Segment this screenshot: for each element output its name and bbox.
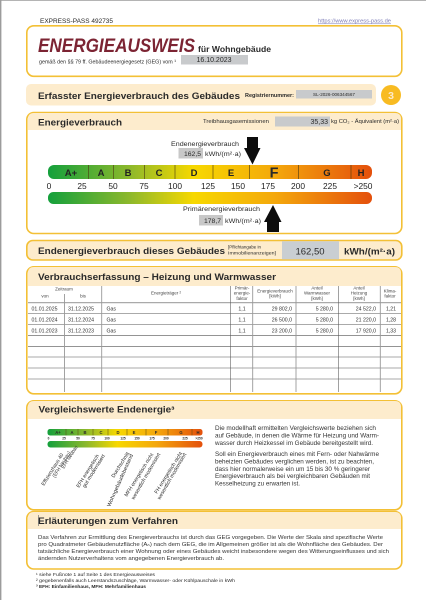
- row 2025: 31.12.2025: [68, 306, 94, 312]
- rotated building labels: Effizienzhaus 40: [41, 452, 65, 487]
- mini scale: 0: [48, 436, 50, 440]
- table header: Energieverbrauch: [257, 288, 293, 294]
- rotated building labels: (EFH Neubau): [52, 450, 73, 479]
- rotated building labels: wesentlich modernisiert: [157, 452, 189, 501]
- footnotes: ³ EFH: Einfamilienhaus, MFH: Mehrfamilienhaus: [36, 584, 147, 589]
- colour scale: G: [323, 168, 331, 179]
- rotated building labels: EFH energetisch: [76, 454, 101, 489]
- value: 162,50: [295, 246, 325, 258]
- colour scale: D: [191, 168, 198, 179]
- mini scale: 25: [62, 436, 66, 440]
- scale numbers: 75: [139, 181, 149, 191]
- heading: Endenergieverbrauch dieses Gebäudes: [38, 246, 225, 257]
- final energy label: Endenergieverbrauch: [171, 141, 239, 148]
- explanatory text: Kesselheizung zu erwarten ist.: [215, 482, 300, 488]
- mini scale: B: [83, 430, 87, 435]
- explanatory paragraph: pro Quadratmeter Gebäudenutzfläche (Aₙ) nach dem GEG, die im Allgemeinen größer ist als die Wohnfläche des Gebäudes. Der: [38, 542, 383, 548]
- scale numbers: 225: [323, 181, 337, 191]
- explanatory text: dass hier normalerweise ein um 15 bis 30 % geringerer: [215, 467, 370, 473]
- mini scale: 225: [182, 436, 188, 440]
- row 2024: [32, 318, 396, 324]
- arrow: primary energy marker: [264, 205, 282, 232]
- table header: [41, 286, 397, 301]
- mini scale: D: [116, 430, 120, 435]
- panel: final energy consumption of this building: [27, 240, 402, 260]
- scale numbers: 175: [261, 181, 275, 191]
- final energy value: 162,5: [184, 151, 201, 158]
- row 2024: 1,1: [238, 318, 246, 324]
- table header: [kWh]: [353, 296, 365, 301]
- row 2024: 26 500,0: [272, 318, 292, 324]
- row 2024: 5 280,0: [316, 318, 333, 324]
- mini scale: A: [70, 430, 74, 435]
- row 2023: 23 200,0: [272, 328, 292, 334]
- unit: kWh/(m²·a): [344, 246, 395, 256]
- heading: Vergleichswerte Endenergie³: [38, 404, 175, 414]
- explanatory text: Die modellhaft ermittelten Vergleichswerte beziehen sich: [215, 426, 376, 432]
- value field background: [282, 241, 339, 259]
- mini scale: C: [99, 430, 103, 435]
- mini scale: 175: [149, 436, 155, 440]
- footnotes: ¹ siehe Fußnote 1 auf Seite 1 des Energieausweises: [36, 572, 156, 578]
- table header: Zeitraum: [55, 286, 73, 292]
- colour scale: B: [125, 168, 132, 179]
- rotated building labels: [41, 445, 189, 508]
- explanatory text: wasser durch Heizkessel im Gebäude bereitgestellt wird.: [214, 441, 373, 447]
- arrow: final energy marker: [244, 137, 260, 164]
- scale numbers: 25: [77, 181, 87, 191]
- table header: bis: [80, 294, 87, 298]
- row 2024: Gas: [106, 318, 116, 324]
- registration number: SL-2026-006344567: [313, 92, 355, 97]
- mini scale: 50: [76, 436, 80, 440]
- title: ENERGIEAUSWEIS: [38, 35, 195, 57]
- row 2025: [32, 306, 396, 312]
- explanatory text: Soll ein Energieverbrauch eines mit Fern- oder Nahwärme: [215, 452, 380, 458]
- table header: Anteil: [311, 286, 323, 290]
- panel: comparison values: [27, 401, 402, 510]
- mini scale: 200: [163, 436, 169, 440]
- row 2025: 01.01.2025: [32, 306, 58, 312]
- table header: Warmwasser: [304, 291, 331, 296]
- row 2023: Gas: [106, 328, 116, 334]
- explanatory paragraph: ändernden Nutzerverhaltens vom angegebenen Energieverbrauch ab.: [38, 556, 224, 562]
- subtitle: für Wohngebäude: [198, 44, 271, 54]
- rotated building labels: Durchschnitt: [111, 451, 131, 479]
- mini scale: F: [155, 430, 158, 435]
- colour scale: F: [270, 166, 279, 182]
- table header: Heizung: [351, 291, 368, 296]
- mini scale: [48, 429, 203, 448]
- row 2024: 31.12.2024: [68, 318, 94, 324]
- explanatory paragraph: [38, 535, 389, 562]
- mini scale: 150: [134, 436, 140, 440]
- footnotes: ² gegebenenfalls auch Leerstandszuschläge, Warmwasser- oder Kühlpauschale in kWh: [36, 578, 236, 583]
- final energy value: [178, 148, 241, 158]
- primary energy value: kWh/(m²·a): [225, 218, 261, 225]
- panel: section heading bar: [26, 84, 376, 106]
- panel: final energy consumption of this building: Immobilienanzeigen]: [228, 250, 276, 256]
- scale numbers: 150: [231, 181, 245, 191]
- mini scale: 125: [120, 436, 126, 440]
- row 2023: 31.12.2023: [68, 328, 94, 334]
- table header: faktor: [236, 296, 248, 301]
- explanatory text: [214, 426, 380, 488]
- legal reference: gemäß den §§ 79 ff. Gebäudeenergiegesetz (GEG) vom ¹: [39, 60, 176, 66]
- table header: von: [41, 294, 49, 298]
- emissions label: Treibhausgasemissionen: [203, 119, 269, 125]
- explanatory text: beheizten Gebäudes verglichen werden, ist zu beachten,: [215, 460, 374, 466]
- explanatory paragraph: tatsächliche Energieverbrauch einer Wohnung oder eines Gebäudes weicht insbesondere wegen des Witterungseinflusses und sich: [38, 549, 389, 555]
- row 2023: 17 920,0: [356, 328, 376, 334]
- panel: title: [27, 26, 402, 76]
- colour scale: E: [228, 168, 234, 179]
- row 2023: 01.01.2023: [32, 328, 58, 334]
- top line: website link: https://www.express-pass.de: [318, 18, 391, 24]
- panel header: [28, 113, 401, 130]
- emissions value: [275, 116, 330, 126]
- panel: consumption records: [27, 267, 402, 394]
- mini scale: E: [133, 430, 136, 435]
- panel: energy consumption: [27, 112, 402, 234]
- row 2025: Gas: [106, 306, 116, 312]
- rotated building labels: Wohngebäudebestand: [106, 453, 135, 508]
- rotated building labels: gut modernisiert: [82, 453, 107, 489]
- table header: Primär-: [235, 286, 250, 290]
- row 2025: 1,21: [386, 306, 396, 312]
- rotated building labels: EFH Neubau: [61, 445, 80, 470]
- gradient bar: [48, 192, 372, 204]
- colour scale: H: [358, 168, 365, 179]
- badge: page number: 3: [388, 90, 394, 102]
- row 2023: 1,1: [238, 328, 246, 334]
- row 2025: 5 280,0: [316, 306, 333, 312]
- section heading: Erfasster Energieverbrauch des Gebäudes: [38, 91, 240, 102]
- row 2024: 1,28: [386, 318, 396, 324]
- row 2024: 21 220,0: [356, 318, 376, 324]
- colour scale: C: [156, 168, 163, 179]
- panel: explanations: [27, 512, 402, 569]
- explanatory text: Energieverbrauch als bei vergleichbaren Gebäuden mit: [215, 474, 370, 480]
- emissions value: 35,33: [310, 119, 328, 126]
- scale numbers: >250: [354, 181, 373, 191]
- mini scale: 100: [104, 436, 110, 440]
- rotated building labels: FH energetisch nicht: [154, 451, 184, 495]
- row 2023: [32, 328, 396, 334]
- table header: Anteil: [353, 286, 365, 290]
- scale numbers: 200: [291, 181, 305, 191]
- mini scale: H: [196, 430, 200, 435]
- primary energy value: 178,7: [204, 218, 221, 225]
- table header: energie-: [234, 291, 251, 296]
- scale numbers: 50: [108, 181, 118, 191]
- date field: [181, 55, 248, 64]
- registration number: [296, 90, 372, 98]
- colour scale: A+: [65, 168, 78, 179]
- row 2025: 29 802,0: [272, 306, 292, 312]
- scale numbers: 100: [168, 181, 182, 191]
- final energy value: kWh/(m²·a): [205, 151, 241, 158]
- primary energy value: [199, 215, 261, 226]
- table header: Energieträger ²: [151, 290, 182, 296]
- colour scale: [48, 165, 372, 179]
- row 2024: 01.01.2024: [32, 318, 58, 324]
- panel header: [28, 267, 401, 286]
- panel header: [28, 512, 401, 529]
- scale numbers: 125: [201, 181, 215, 191]
- registration label: Registriernummer:: [245, 93, 294, 99]
- note: [Pflichtangabe in: [228, 244, 262, 250]
- mini scale: G: [179, 430, 183, 435]
- table header: [kWh]: [311, 296, 323, 301]
- mini scale: A+: [55, 430, 61, 435]
- table header: [kWh]: [269, 294, 281, 298]
- date field: 16.10.2023: [196, 57, 232, 64]
- table lines: [28, 286, 401, 392]
- mini scale: 75: [91, 436, 95, 440]
- footnotes: [36, 572, 236, 589]
- table header: faktor: [384, 294, 396, 298]
- explanatory paragraph: Das Verfahren zur Ermittlung des Energieverbrauchs ist durch das GEG vorgegeben. Die Werte der Skala sind spezifische Werte: [38, 535, 383, 541]
- emissions unit: kg CO₂ - Äquivalent (m²·a): [331, 118, 399, 125]
- primary energy label: Primärenergieverbrauch: [183, 206, 260, 213]
- row 2025: 24 522,0: [356, 306, 376, 312]
- heading: Verbrauchserfassung – Heizung und Warmwasser: [38, 272, 276, 282]
- row 2023: 1,33: [386, 328, 396, 334]
- table header: Klima-: [384, 288, 397, 294]
- rotated building labels: wesentlich modernisiert: [131, 452, 163, 501]
- rotated building labels: MFH energetisch nicht: [124, 452, 155, 498]
- cursor mark: [37, 515, 40, 526]
- explanatory text: auf Gebäude, in denen die Wärme für Heizung und Warm-: [215, 434, 379, 440]
- row 2025: 1,1: [238, 306, 246, 312]
- scale numbers: [47, 181, 373, 191]
- top line: express pass number: EXPRESS-PASS 492735: [40, 19, 114, 25]
- colour scale: A: [98, 168, 105, 179]
- heading: Erläuterungen zum Verfahren: [38, 516, 178, 526]
- row 2023: 5 280,0: [316, 328, 333, 334]
- table: [28, 286, 401, 392]
- mini scale: >250: [195, 436, 203, 440]
- heading: Energieverbrauch: [38, 118, 122, 128]
- panel header: [28, 401, 401, 419]
- scale numbers: 0: [47, 181, 52, 191]
- badge: page number: [381, 85, 401, 105]
